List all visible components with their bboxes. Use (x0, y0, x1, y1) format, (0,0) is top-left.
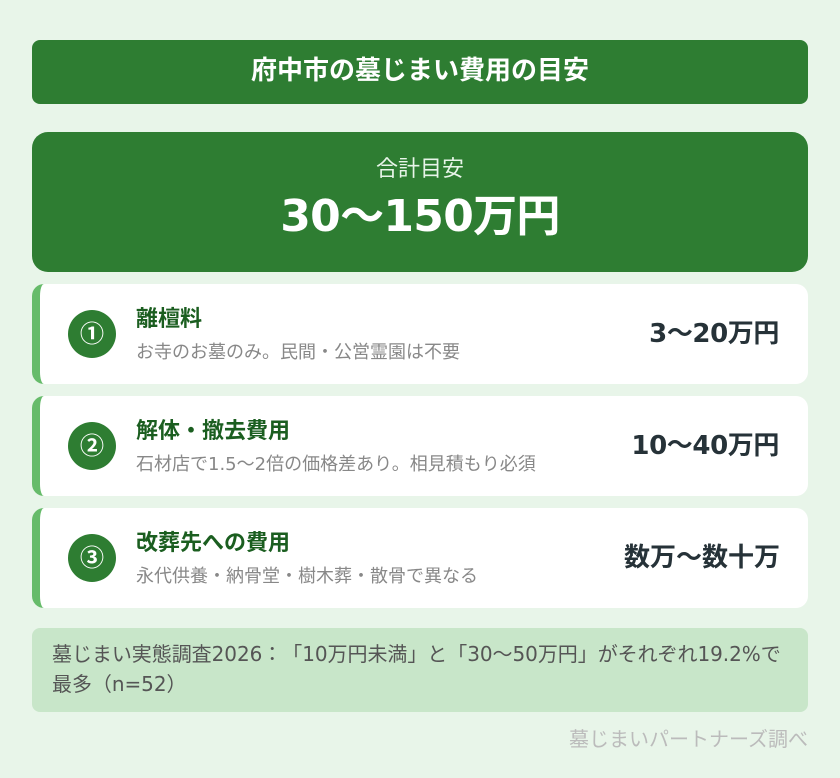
panel: item 1 (32, 284, 808, 384)
number badge 2 (68, 422, 116, 470)
panel: item 2 (32, 396, 808, 496)
callout: survey note (32, 628, 808, 712)
number badge 3: ③ (80, 538, 104, 573)
item 1 description: お寺のお墓のみ。民間・公営霊園は不要 (136, 342, 460, 363)
item 2 name: 解体・撤去費用 (136, 419, 290, 444)
panel: total estimate (32, 132, 808, 272)
number badge 3 (68, 534, 116, 582)
item 3 amount: 数万〜数十万 (624, 543, 780, 573)
item 1 amount: 3〜20万円 (649, 319, 779, 349)
item 3 description: 永代供養・納骨堂・樹木葬・散骨で異なる (136, 566, 478, 587)
number badge 1: ① (80, 314, 104, 349)
item 2 description: 石材店で1.5〜2倍の価格差あり。相見積もり必須 (136, 454, 536, 475)
panel: item 3 (32, 508, 808, 608)
item 1 name: 離檀料 (136, 307, 202, 332)
total label: 合計目安 (376, 157, 464, 182)
item 3 name: 改葬先への費用 (136, 531, 290, 556)
title: 府中市の墓じまい費用の目安 (251, 56, 589, 86)
source credit: 墓じまいパートナーズ調べ (569, 727, 808, 751)
number badge 1 (68, 310, 116, 358)
total value: 30〜150万円 (280, 191, 560, 242)
number badge 2: ② (80, 426, 104, 461)
item 2 amount: 10〜40万円 (631, 431, 779, 461)
title (32, 40, 808, 104)
callout: survey note: 墓じまい実態調査2026：「10万円未満」と「30〜50万円」がそれぞれ19.2%で最多（n=52） (52, 642, 781, 696)
